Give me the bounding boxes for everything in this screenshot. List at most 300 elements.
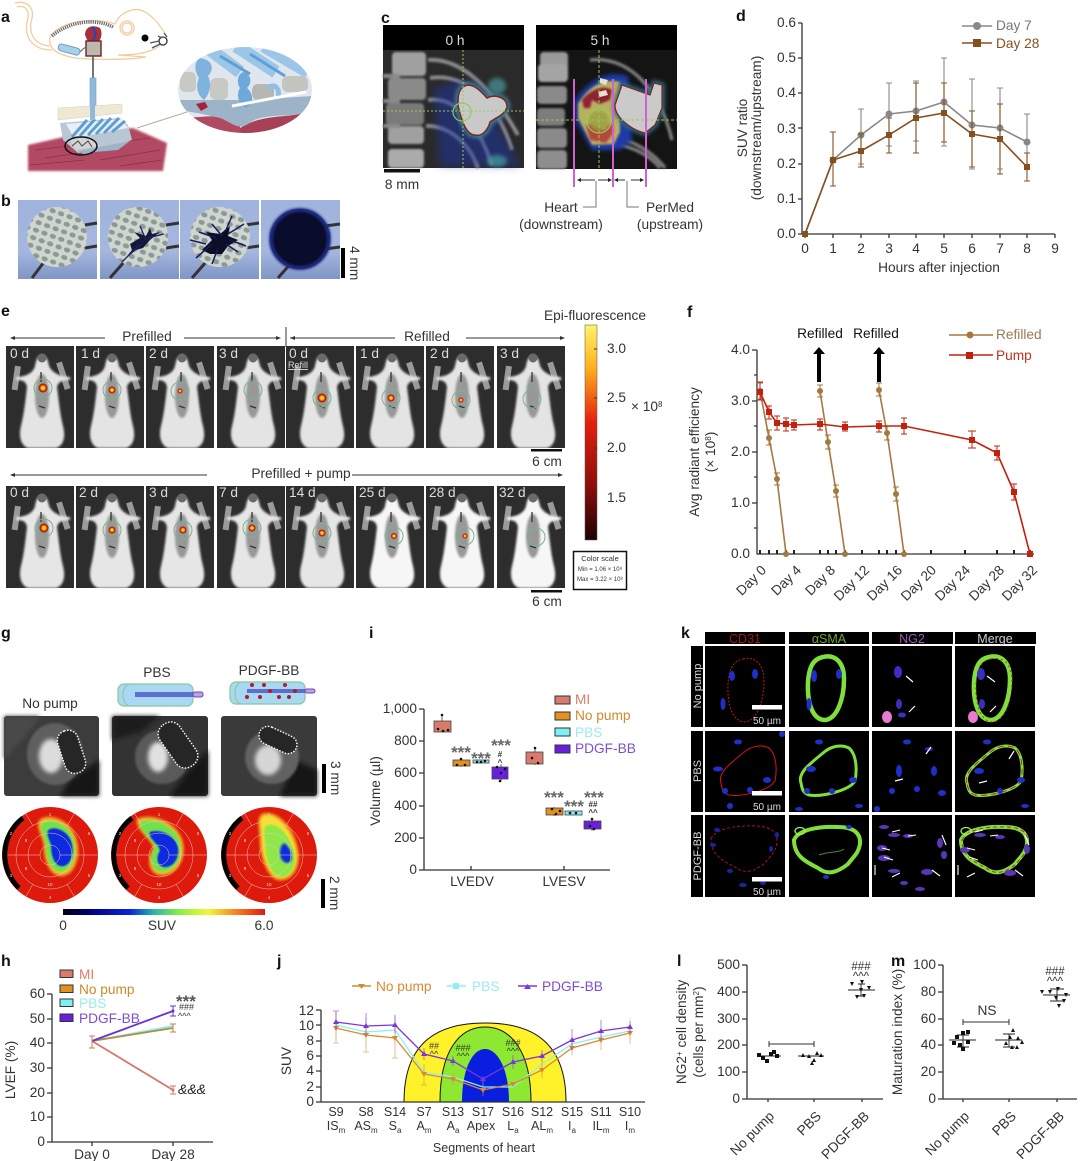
tick labels: 0.0 <box>731 546 750 561</box>
tick labels: PBS <box>989 1109 1019 1138</box>
series: No pump <box>333 1012 633 1096</box>
bracket lines and annotations: PerMed <box>646 200 694 215</box>
x labels: S11 <box>590 1105 612 1119</box>
axis title <box>687 387 718 517</box>
group headers: Prefilled <box>122 329 172 344</box>
row: No pump <box>705 646 1035 727</box>
legend: PBS <box>575 725 602 740</box>
significance marks: ## <box>589 800 598 809</box>
mouse row: prefilled + pump: 25 d <box>359 485 386 500</box>
tick labels: 0 <box>801 241 809 256</box>
bullseye: PBS: 3 <box>119 873 122 878</box>
panel d: SUV ratio chart: d <box>736 8 746 25</box>
bullseye: PDGF-BB <box>221 807 317 903</box>
row: PBS <box>705 731 1035 813</box>
tick labels: 0.4 <box>777 85 796 100</box>
tick labels: 0 <box>928 1091 936 1106</box>
mouse row: prefilled and refilled: 2 d <box>430 346 449 361</box>
panel f: radiant efficiency chart <box>687 304 1042 604</box>
panel a: mouse with implanted device <box>1 2 312 171</box>
tick labels: 100 <box>717 1064 740 1079</box>
axes <box>752 350 1034 554</box>
x labels: a <box>572 1126 577 1135</box>
legend: No pump <box>376 979 432 994</box>
tick labels: 300 <box>717 1011 740 1026</box>
bullseye: PBS: 9 <box>134 866 137 871</box>
colour scale box: Min = 1.06 × 10⁸ <box>578 566 623 573</box>
panel m: maturation index <box>890 953 1077 1161</box>
x labels: a <box>514 1126 519 1135</box>
panel g: scans and bullseye maps <box>1 625 343 933</box>
significance marks: ^^^ <box>507 1046 520 1056</box>
tick labels: + <box>675 1051 684 1056</box>
row labels: No pump <box>692 664 704 708</box>
tick labels: 400 <box>717 984 740 999</box>
bullseye: PDGF-BB: 1 <box>268 812 271 817</box>
panel i: volume box plot <box>368 625 636 889</box>
panel j: SUV segment chart: j <box>276 953 281 970</box>
axis titles: (downstream/upstream) <box>749 56 764 200</box>
bullseye: No pump <box>2 807 98 903</box>
panel l: NG2 cell density: l <box>677 953 681 970</box>
tick labels: 50 <box>30 1011 45 1026</box>
column labels: PBS <box>143 665 171 680</box>
legend: Pump <box>996 348 1032 363</box>
annotation arrows: Refilled: Refilled <box>797 326 843 341</box>
tick labels <box>3 986 195 1161</box>
significance marks: *** <box>564 797 584 816</box>
panel e: fluorescence mouse images: e <box>1 303 10 320</box>
legend: Day 28 <box>996 36 1040 51</box>
tick labels: (cells per mm <box>691 995 706 1078</box>
legend <box>962 18 1040 51</box>
bullseye: PDGF-BB: 4 <box>268 895 271 900</box>
SUV colour bar: 6.0 <box>254 918 274 933</box>
fluorescence colour bar <box>544 308 663 540</box>
colour scale box: Color scale <box>581 554 619 563</box>
fluorescence colour bar: 8 <box>658 400 663 409</box>
tick labels: 0.2 <box>777 156 796 171</box>
bracket lines and annotations: Heart <box>544 200 578 215</box>
axes <box>798 23 1055 238</box>
scale bars 6 cm: 6 cm <box>532 594 562 609</box>
bracket and marks: NS <box>977 1003 997 1018</box>
tick labels: 40 <box>921 1037 936 1052</box>
mouse row: prefilled + pump: 7 d <box>219 485 238 500</box>
fluorescence colour bar: 2.5 <box>607 390 626 405</box>
annotation arrows: Refilled: Refilled <box>853 326 899 341</box>
column headers: CD31 <box>729 632 761 646</box>
tick labels: Day 24 <box>932 562 973 604</box>
axis title: ) <box>703 432 718 436</box>
x labels: m <box>603 1126 610 1135</box>
scale bars 6 cm: 6 cm <box>532 454 562 469</box>
bullseye: PBS: 5 <box>197 873 200 878</box>
bracket and marks <box>769 961 871 1047</box>
tick labels: Day 20 <box>898 562 939 604</box>
tick labels: No pump <box>727 1108 777 1158</box>
image: 5 h <box>536 25 677 169</box>
axis titles: SUV ratio <box>735 98 750 157</box>
tick labels: 500 <box>717 957 740 972</box>
x labels: m <box>425 1126 432 1135</box>
tick labels: PDGF-BB <box>1013 1109 1067 1161</box>
significance marks: ^^^ <box>457 1051 470 1061</box>
series: Day 7 <box>805 58 1030 234</box>
series: PBS <box>336 1012 630 1093</box>
fluorescence colour bar: × 10 <box>631 399 658 414</box>
SUV colour bar: 0 <box>59 918 67 933</box>
bullseye: PDGF-BB: 8 <box>244 838 247 843</box>
scale bar 2 mm: 2 mm <box>327 876 342 910</box>
mouse row: prefilled + pump: 14 d <box>289 485 316 500</box>
legend: No pump <box>575 708 631 723</box>
panel l: NG2 cell density <box>674 953 883 1161</box>
tick labels: 2 <box>692 990 701 995</box>
series: pump <box>757 382 1033 557</box>
column labels <box>22 663 299 711</box>
tick labels: 1,000 <box>383 701 417 716</box>
significance marks <box>451 736 604 817</box>
axes <box>419 709 610 870</box>
group headers: Prefilled + pump <box>251 466 351 481</box>
x labels: AS <box>354 1119 371 1133</box>
x labels: S7 <box>416 1105 432 1119</box>
panel k: immunofluorescence <box>681 625 1036 898</box>
tick labels: 3.0 <box>731 393 750 408</box>
scatter points <box>949 987 1070 1051</box>
tick labels: 0.3 <box>777 121 796 136</box>
x labels: S9 <box>328 1105 344 1119</box>
tick labels: 60 <box>921 1011 936 1026</box>
legend: MI <box>79 967 94 982</box>
tick labels: 2 <box>857 241 865 256</box>
mouse row: prefilled and refilled: 1 d <box>81 346 100 361</box>
photo 2 <box>100 200 179 279</box>
tick labels: NG2 <box>674 1056 689 1084</box>
legend: PBS <box>79 996 106 1011</box>
x labels: A <box>416 1119 425 1133</box>
tick labels: 80 <box>921 984 936 999</box>
semi-circle zones <box>404 1023 566 1102</box>
panel b: dye diffusion photos <box>1 193 362 280</box>
tick labels: 40 <box>30 1035 45 1050</box>
SUV colour bar: SUV <box>148 918 177 933</box>
x labels: I <box>625 1119 628 1133</box>
significance marks: *** <box>176 992 196 1011</box>
tick labels: Day 12 <box>831 563 872 604</box>
SUV colour bar <box>59 909 274 933</box>
tick labels: Day 28 <box>966 562 1007 604</box>
x labels: S10 <box>619 1105 641 1119</box>
bracket and marks: ### <box>1045 966 1065 978</box>
tick labels: 4.0 <box>731 342 750 357</box>
tick labels: LVEF (%) <box>3 1041 18 1099</box>
bullseye: PBS: 10 <box>156 882 162 887</box>
scale bars 6 cm <box>531 449 562 609</box>
bullseye: No pump: 3 <box>10 873 13 878</box>
tick labels: Volume (µl) <box>368 756 383 826</box>
x labels: m <box>339 1126 346 1135</box>
icon: mouse outline <box>15 2 167 59</box>
tick labels: 0 <box>37 1134 45 1149</box>
row: PDGF-BB <box>705 815 1035 898</box>
axis titles: Hours after injection <box>878 260 1000 275</box>
scale bar: 4 mm <box>347 246 362 280</box>
bullseye: No pump: 10 <box>47 882 53 887</box>
bullseye: No pump: 5 <box>88 873 91 878</box>
legend: PBS <box>472 979 499 994</box>
x labels: S17 <box>472 1105 494 1119</box>
photo 4 <box>261 200 340 279</box>
fluorescence colour bar: Epi-fluorescence <box>544 308 646 323</box>
significance marks: *** <box>471 749 491 768</box>
tick labels: 400 <box>394 798 417 813</box>
bullseye: PBS: 6 <box>197 831 200 836</box>
icon: heart and pocket <box>58 26 101 116</box>
x labels: a <box>397 1126 402 1135</box>
mouse row: prefilled + pump: 0 d <box>10 485 29 500</box>
significance marks: *** <box>584 788 604 807</box>
legend: PDGF-BB <box>542 979 603 994</box>
panel j: SUV segment chart <box>276 953 645 1155</box>
bracket lines and annotations: (downstream) <box>519 217 603 232</box>
x labels: S13 <box>442 1105 464 1119</box>
annotation arrows: Refilled <box>797 326 899 382</box>
tick labels: 0.5 <box>777 50 796 65</box>
tick labels: No pump <box>922 1108 972 1158</box>
image: 0 h <box>383 25 524 168</box>
scale bar 8 mm: 8 mm <box>385 177 419 192</box>
significance marks: ### <box>179 1002 194 1012</box>
legend <box>949 327 1042 363</box>
group headers <box>10 327 565 481</box>
tick labels: 200 <box>717 1037 740 1052</box>
tick labels <box>777 15 1059 256</box>
tick labels: 20 <box>30 1085 45 1100</box>
y tick labels: 6 <box>306 1048 314 1063</box>
tick labels: PDGF-BB <box>818 1109 872 1161</box>
mouse row: prefilled and refilled: 1 d <box>360 346 379 361</box>
legend: PDGF-BB <box>575 741 636 756</box>
x labels: IL <box>592 1119 603 1133</box>
x labels: AL <box>531 1119 546 1133</box>
legend <box>352 979 603 994</box>
tick labels: 8 <box>1023 241 1031 256</box>
x labels: Apex <box>467 1119 496 1133</box>
tick labels: 10 <box>30 1109 45 1124</box>
tick labels: 0.1 <box>777 191 796 206</box>
x labels: IS <box>327 1119 339 1133</box>
panel b: dye diffusion photos: b <box>1 193 11 210</box>
tick labels <box>674 957 872 1161</box>
image: 5 h: 5 h <box>590 33 610 48</box>
y tick labels: 12 <box>299 1003 314 1018</box>
bullseye: PDGF-BB: 3 <box>229 873 232 878</box>
tick labels: Day 16 <box>864 562 905 604</box>
column headers: αSMA <box>812 632 847 646</box>
MRI image: No pump <box>4 716 99 796</box>
y tick labels: 10 <box>299 1018 314 1033</box>
legend: PDGF-BB <box>79 1011 140 1026</box>
x labels: S14 <box>384 1105 406 1119</box>
significance marks: # <box>498 750 503 759</box>
bullseye: PDGF-BB: 2 <box>229 831 232 836</box>
x labels: A <box>447 1119 455 1133</box>
axis title: (× 10 <box>703 441 718 472</box>
mouse row: prefilled + pump: 3 d <box>149 485 168 500</box>
bullseye: PDGF-BB: 9 <box>244 866 247 871</box>
x ticks <box>760 550 1030 554</box>
tick labels: 600 <box>394 765 417 780</box>
panel k: immunofluorescence: k <box>681 625 690 642</box>
group headers: Refilled <box>404 329 450 344</box>
significance marks: ### <box>455 1043 471 1053</box>
legend: No pump <box>79 982 135 997</box>
panel d: SUV ratio chart <box>735 8 1059 275</box>
significance marks: ^^ <box>588 808 598 817</box>
significance marks <box>429 1038 521 1061</box>
x labels: S15 <box>561 1105 583 1119</box>
x labels: L <box>507 1119 514 1133</box>
tick labels: 100 <box>913 957 936 972</box>
legend: Refilled <box>996 327 1042 342</box>
tick labels: 30 <box>30 1060 45 1075</box>
bullseye: PDGF-BB: 5 <box>307 873 310 878</box>
x labels: S12 <box>531 1105 553 1119</box>
mouse row: prefilled and refilled: 0 d <box>10 346 29 361</box>
axes <box>47 994 213 1146</box>
bullseye: PDGF-BB: 10 <box>266 882 272 887</box>
column labels: PDGF-BB <box>239 663 299 678</box>
fluorescence colour bar: 3.0 <box>607 341 626 356</box>
legend: Day 7 <box>996 18 1032 33</box>
colour scale box <box>574 552 626 590</box>
icon: PBS pump <box>118 684 203 706</box>
x labels: Segments of heart <box>433 1141 536 1155</box>
mouse row: prefilled and refilled: Refill <box>288 360 308 370</box>
x labels: I <box>568 1119 572 1133</box>
row: PBS: 50 µm <box>753 802 781 813</box>
panel h: LVEF line chart: h <box>1 953 11 970</box>
row labels: PBS <box>692 760 704 782</box>
tick labels: 2.0 <box>731 444 750 459</box>
tick labels: 0 <box>732 1091 740 1106</box>
colour scale box: Max = 3.22 × 10⁸ <box>577 576 623 583</box>
significance marks: *** <box>491 736 511 755</box>
panel c: PET/CT images: c <box>381 10 390 27</box>
bracket lines and annotations: (upstream) <box>637 217 703 232</box>
column headers: NG2 <box>899 632 925 646</box>
panel c: PET/CT images <box>381 10 703 232</box>
fluorescence colour bar: 1.5 <box>607 490 626 505</box>
bullseye: PBS: 1 <box>158 812 161 817</box>
tick labels: LVESV <box>542 874 586 889</box>
mouse row: prefilled and refilled: 2 d <box>149 346 168 361</box>
scale bar 8 mm <box>384 169 420 192</box>
bullseye: No pump: 6 <box>88 831 91 836</box>
tick labels: 7 <box>996 241 1004 256</box>
tick labels <box>731 342 1040 604</box>
mouse row: prefilled + pump: 2 d <box>79 485 98 500</box>
MRI image: PBS <box>112 716 208 796</box>
mouse row: prefilled and refilled: 3 d <box>500 346 519 361</box>
scale bar 3 mm: 3 mm <box>328 761 343 795</box>
panel f: radiant efficiency chart: f <box>687 304 693 321</box>
axis title: Avg radiant efficiency <box>687 387 702 517</box>
tick labels: 1 <box>829 241 837 256</box>
panel h: LVEF line chart <box>1 953 213 1161</box>
bracket and marks <box>963 966 1065 1025</box>
fluorescence colour bar: 2.0 <box>607 440 626 455</box>
y tick labels: 2 <box>306 1079 314 1094</box>
significance marks <box>176 992 206 1097</box>
bullseye: No pump: 2 <box>10 831 13 836</box>
device <box>58 100 187 155</box>
mouse row: prefilled and refilled: 3 d <box>219 346 238 361</box>
tick labels: PBS <box>794 1109 824 1138</box>
bullseye: No pump: 1 <box>49 812 52 817</box>
tick labels: 0 <box>409 862 417 877</box>
row: No pump: 50 µm <box>753 716 781 727</box>
tick labels: 3 <box>885 241 893 256</box>
mouse row: prefilled + pump <box>6 485 565 588</box>
bracket and marks: ^^^ <box>1047 976 1064 988</box>
tick labels: Maturation index (%) <box>890 969 905 1095</box>
panel m: maturation index: m <box>891 953 905 970</box>
bracket and marks: ^^^ <box>853 971 870 983</box>
significance marks: *** <box>451 743 471 762</box>
axes <box>938 965 1077 1102</box>
bracket and marks: ### <box>851 961 871 973</box>
tick labels: 1.0 <box>731 495 750 510</box>
x labels: S <box>389 1119 397 1133</box>
MRI image: PDGF-BB <box>221 716 317 796</box>
tick labels: Day 32 <box>999 563 1040 604</box>
column headers: Merge <box>977 632 1013 646</box>
tick labels: LVEDV <box>450 874 495 889</box>
tick labels: 0.0 <box>777 226 796 241</box>
series: PDGF-BB <box>333 1011 633 1081</box>
series lines <box>89 1006 176 1094</box>
row labels: PDGF-BB <box>692 832 704 880</box>
tick labels: 9 <box>1051 241 1059 256</box>
column labels: No pump <box>22 696 78 711</box>
axes <box>742 965 883 1102</box>
tick labels <box>890 957 1067 1161</box>
bullseye: No pump: 4 <box>49 895 52 900</box>
significance marks: ## <box>429 1041 439 1051</box>
bullseye: PBS: 8 <box>134 838 137 843</box>
significance marks: *** <box>544 788 564 807</box>
tick labels: Day 8 <box>802 562 838 598</box>
bullseye: No pump: 9 <box>25 866 28 871</box>
axis title: 8 <box>704 436 713 441</box>
axis titles <box>735 56 1000 275</box>
significance marks: ^^ <box>430 1049 439 1059</box>
x labels <box>327 1105 641 1155</box>
tick labels: Day 0 <box>733 562 769 598</box>
tick labels: 800 <box>394 733 417 748</box>
photo 1 <box>18 200 97 279</box>
data points <box>437 714 595 830</box>
panel a: mouse with implanted device: a <box>1 9 10 26</box>
axes <box>316 1010 645 1102</box>
bullseye: PBS <box>111 807 207 903</box>
tick labels: 200 <box>394 830 417 845</box>
magnified view of device <box>178 46 312 133</box>
muscle tissue block <box>28 128 167 171</box>
